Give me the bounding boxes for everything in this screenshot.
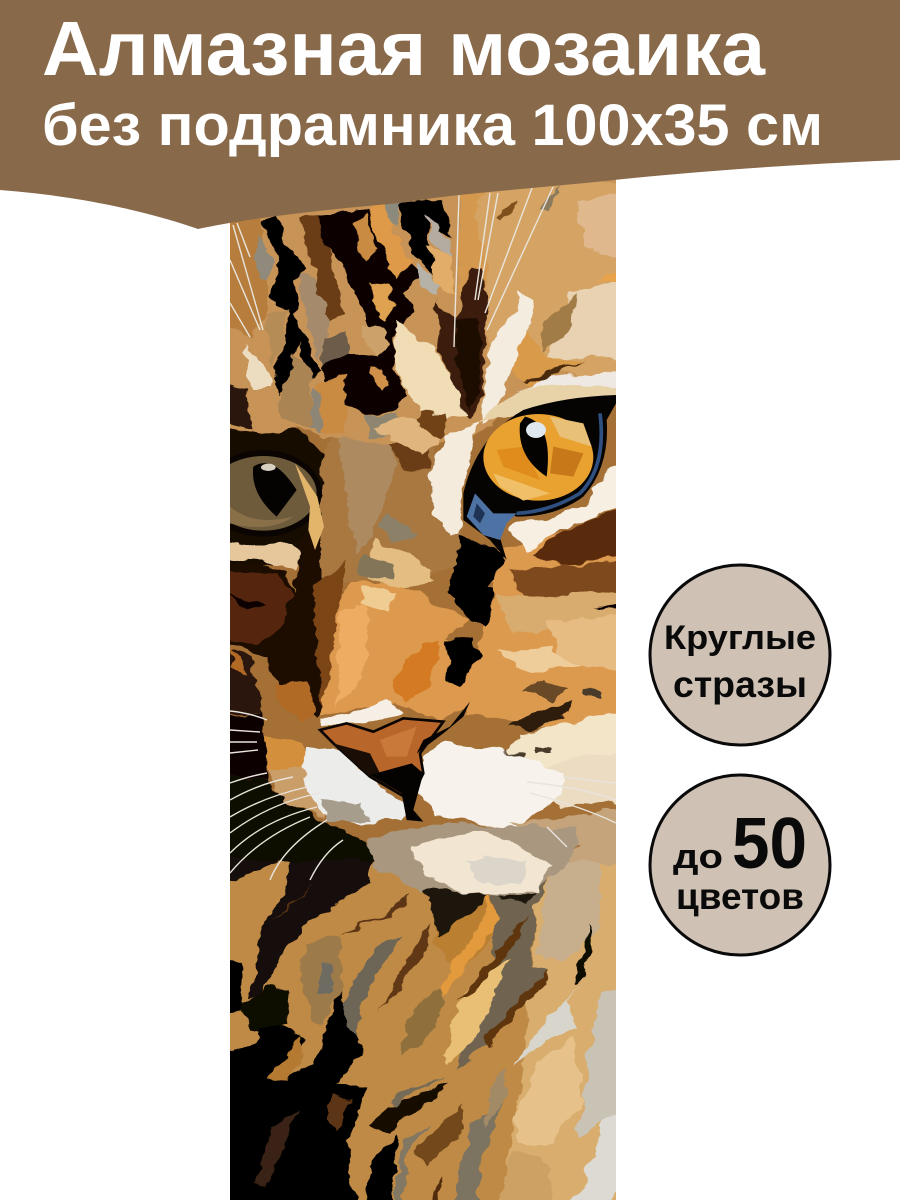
title — [42, 6, 823, 158]
lower left dark area — [230, 774, 375, 864]
white muzzle, left — [323, 700, 403, 727]
badge: round rhinestones — [650, 565, 830, 745]
badge: round rhinestones: Круглые — [664, 619, 816, 657]
whiskers — [230, 187, 616, 880]
cat forehead fur and stripes — [230, 180, 616, 444]
badge: up to 50 colours — [650, 775, 830, 955]
illustration: cat portrait painting — [230, 180, 616, 1200]
badge: up to 50 colours: 50 — [732, 804, 807, 884]
nose bridge — [319, 437, 464, 584]
nose — [320, 702, 470, 822]
dark left side of the face — [230, 550, 322, 718]
white muzzle, right — [544, 754, 616, 809]
badge: round rhinestones: стразы — [673, 664, 807, 705]
header banner — [0, 0, 900, 229]
subtitle: без подрамника 100х35 см — [42, 93, 823, 158]
cat face — [230, 404, 616, 897]
muzzle top — [320, 580, 480, 720]
cat chest fur — [230, 857, 616, 1200]
painted fur layers — [230, 180, 616, 1200]
chin — [509, 808, 616, 866]
title: Алмазная мозаика — [42, 6, 766, 92]
badge: up to 50 colours: цветов — [676, 876, 804, 917]
left eye — [230, 450, 324, 550]
badge: up to 50 colours: до — [673, 838, 723, 876]
right eye — [463, 395, 616, 560]
right cheek — [464, 530, 616, 728]
left eye surroundings — [230, 427, 325, 566]
fur around the right eye — [374, 384, 616, 553]
